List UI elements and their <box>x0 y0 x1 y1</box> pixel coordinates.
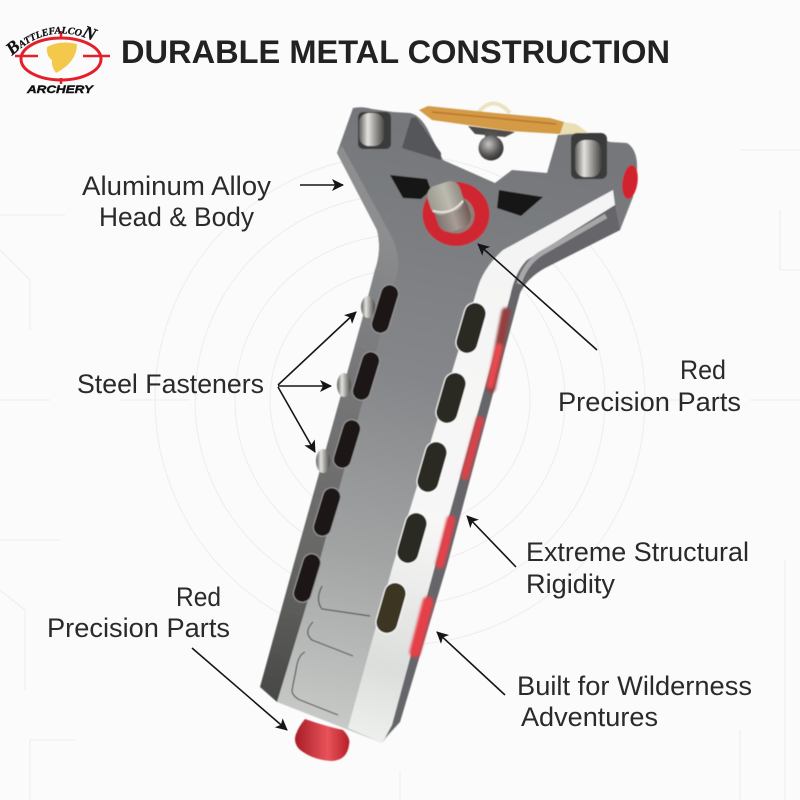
label: Built for Wilderness Adventures: Built for Wilderness <box>517 671 752 701</box>
arrow: structural rigidity <box>467 516 516 567</box>
label: Built for Wilderness Adventures <box>517 671 752 732</box>
logo subtitle: ARCHERY <box>26 84 95 96</box>
label: Red Precision Parts, left: Precision Parts <box>47 613 230 643</box>
right slots <box>373 300 489 636</box>
left side wall <box>260 146 398 702</box>
label: Steel Fasteners: Steel Fasteners <box>77 369 264 399</box>
right red knob <box>620 164 640 200</box>
left roller <box>358 112 391 149</box>
label: Built for Wilderness Adventures: Adventures <box>521 702 658 732</box>
label: Extreme Structural Rigidity: Rigidity <box>526 569 615 599</box>
left slots <box>291 282 401 605</box>
label: Extreme Structural Rigidity <box>526 537 749 599</box>
arrows: steel fasteners <box>278 312 356 452</box>
title: DURABLE METAL CONSTRUCTION <box>121 34 670 70</box>
red bottom cap <box>295 719 349 761</box>
label: Red Precision Parts, right: Red <box>680 355 726 385</box>
white chamfer <box>348 190 615 743</box>
steel fasteners <box>316 296 375 473</box>
engraved panels <box>292 586 370 715</box>
red side inlays <box>415 312 506 652</box>
right side wall <box>385 205 620 738</box>
logo crosshair <box>15 31 110 84</box>
arrow: red ring <box>478 244 597 350</box>
right arm highlight <box>519 216 606 284</box>
head windows <box>390 175 543 216</box>
triangular plate <box>402 117 441 160</box>
logo wordmark: BATTLEFALCON <box>6 26 98 56</box>
label: Red Precision Parts, left <box>47 582 230 643</box>
slingshot product illustration <box>260 104 640 761</box>
logo falcon emblem <box>47 43 77 73</box>
label: Aluminum Alloy Head and Body <box>82 171 272 232</box>
label: Extreme Structural Rigidity: Extreme Structural <box>526 537 749 567</box>
arrow: red cap <box>192 648 287 730</box>
head and handle silhouette <box>260 107 637 743</box>
label: Red Precision Parts, left: Red <box>176 582 221 612</box>
top band <box>419 104 590 160</box>
label: Red Precision Parts, right: Precision Parts <box>558 387 741 417</box>
arrow: aluminum alloy <box>300 184 343 186</box>
arrow: wilderness <box>437 632 505 695</box>
label: Red Precision Parts, right <box>558 355 741 417</box>
label: Aluminum Alloy Head and Body: Head & Body <box>99 202 254 232</box>
label: Aluminum Alloy Head and Body: Aluminum Alloy <box>82 171 272 201</box>
right roller <box>571 133 607 179</box>
logo: BattleFalcon Archery <box>6 26 110 96</box>
red ring with pin <box>422 178 490 246</box>
